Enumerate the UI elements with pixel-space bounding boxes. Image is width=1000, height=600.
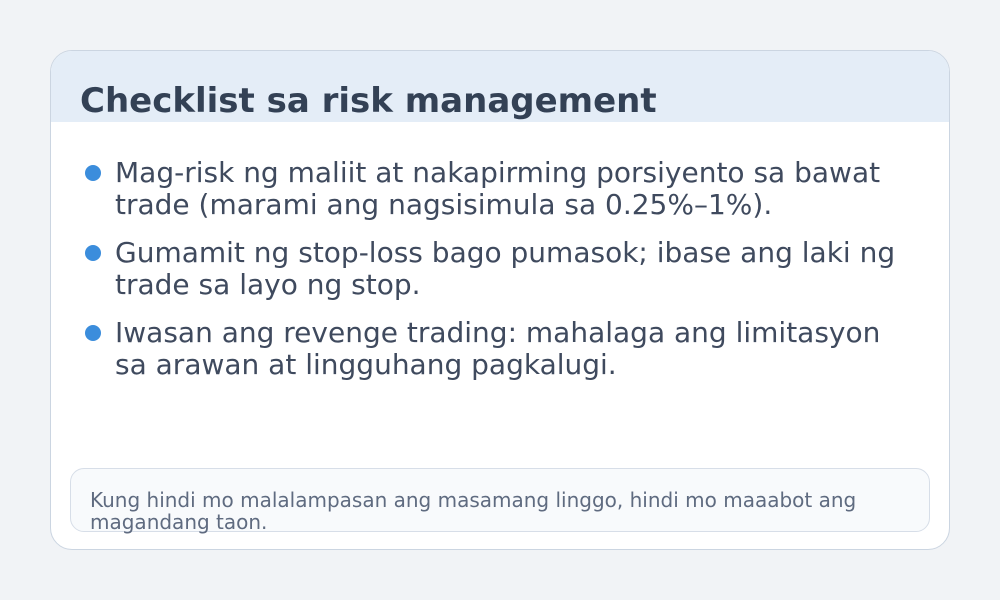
footer quote [70, 468, 930, 532]
bullet 3 [85, 316, 880, 381]
title: Checklist sa risk management [80, 81, 657, 121]
bullet 3: Iwasan ang revenge trading: mahalaga ang limitasyon [115, 316, 880, 349]
footer quote: magandang taon. [90, 510, 267, 534]
bullet 2: Gumamit ng stop-loss bago pumasok; ibase ang laki ng [115, 236, 895, 269]
bullet 1: Mag-risk ng maliit at nakapirming porsiyento sa bawat [115, 156, 880, 189]
bullet 2 [85, 236, 895, 301]
bullet 1 [85, 156, 880, 221]
bullet 1: trade (marami ang nagsisimula sa 0.25%–1%). [115, 188, 772, 221]
footer quote: Kung hindi mo malalampasan ang masamang linggo, hindi mo maaabot ang [90, 488, 856, 512]
card [50, 50, 950, 550]
header band [51, 51, 949, 122]
bullet 3: sa arawan at lingguhang pagkalugi. [115, 348, 617, 381]
bullet 2: trade sa layo ng stop. [115, 268, 421, 301]
